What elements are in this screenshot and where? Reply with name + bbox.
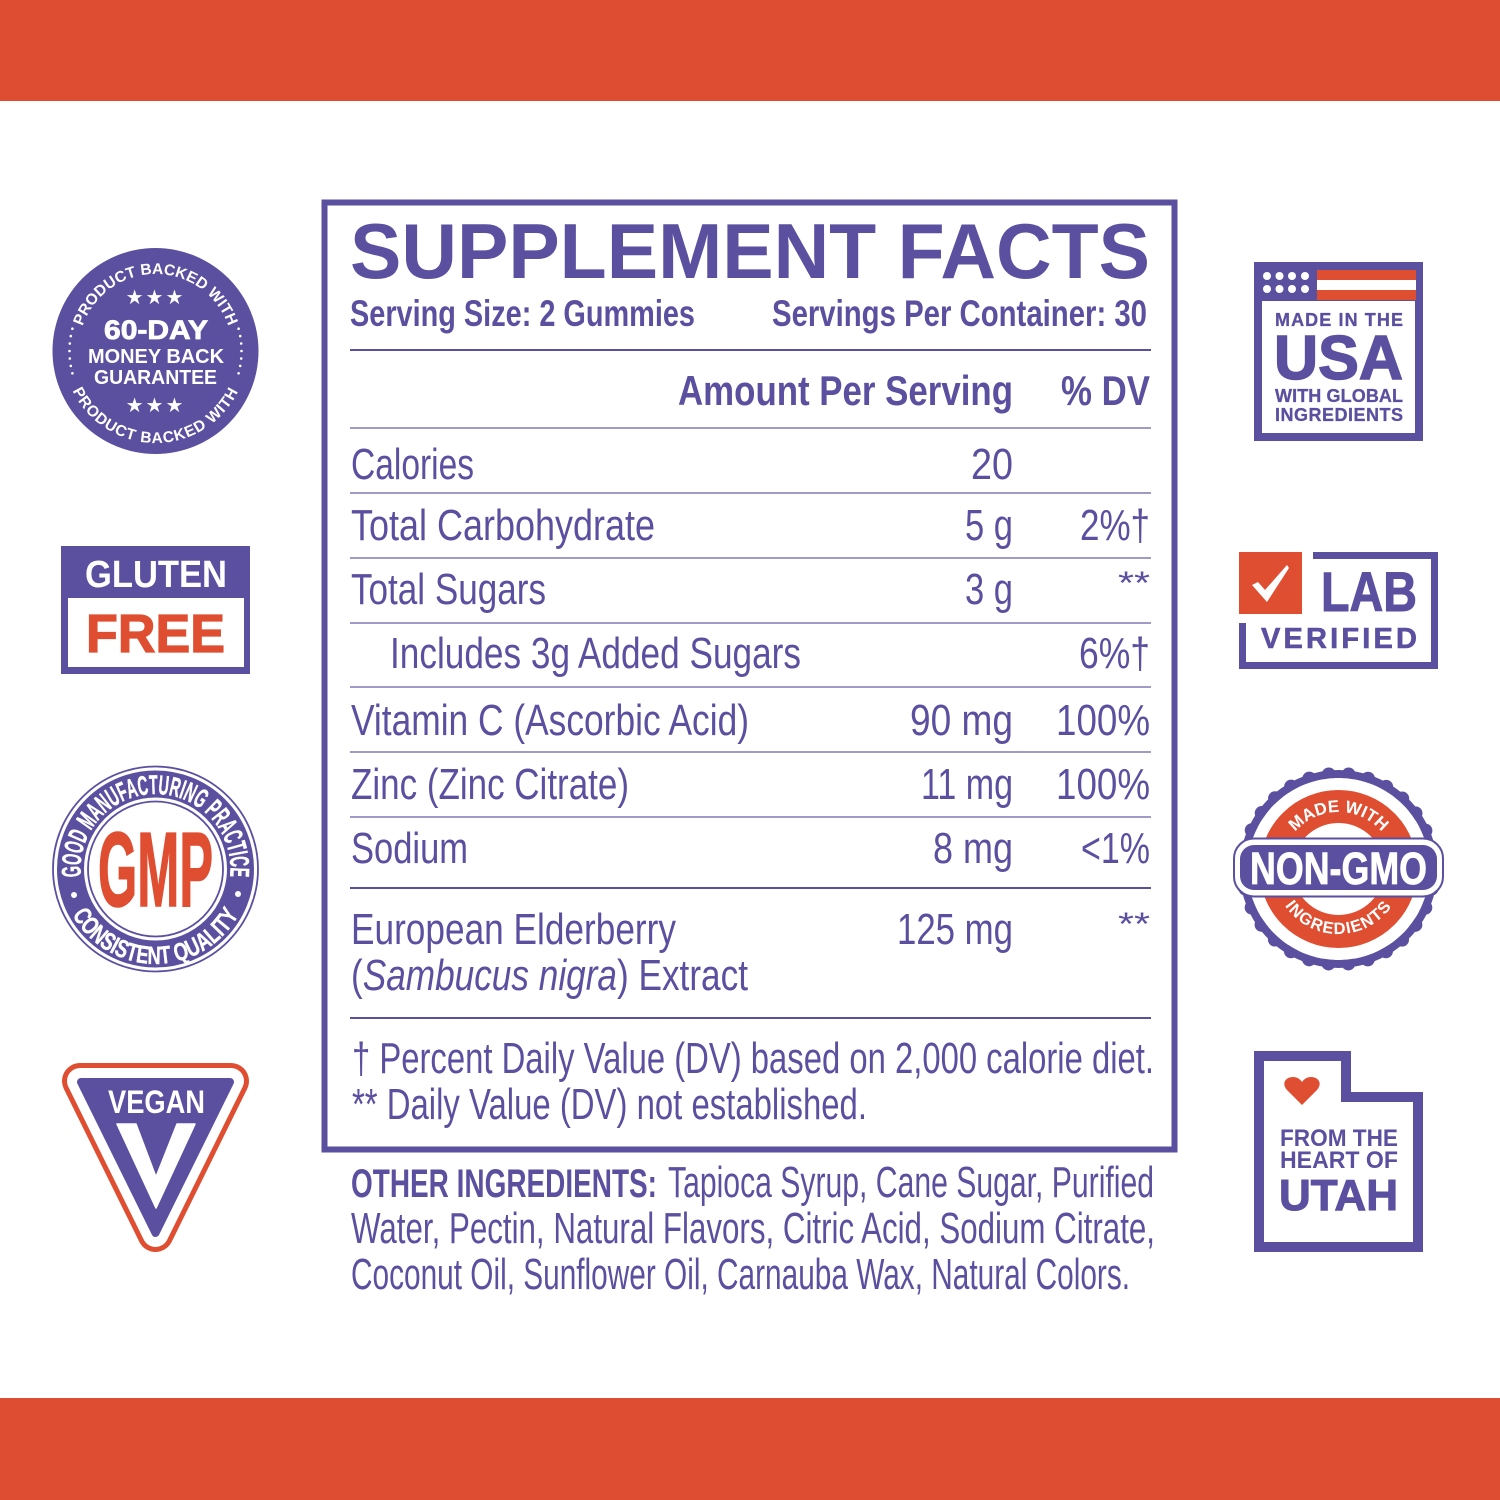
other ingredients: Tapioca Syrup, Cane Sugar, Purified [668,1158,1154,1207]
badge: 60-day money back guarantee: PRODUCT BACKED WITH [72,386,238,444]
footnotes [352,1034,1154,1129]
row: vitamin c: 100% [1056,696,1150,745]
badge: made in the usa: USA [1274,324,1403,393]
row: calories: Calories [351,440,474,489]
badge: 60-day money back guarantee: MONEY BACK [88,345,224,368]
badge: gluten free: FREE [86,604,225,664]
top orange band [0,0,1500,101]
row: sodium [351,824,1150,873]
row: sodium: 8 mg [933,824,1013,873]
badge: vegan [80,1081,231,1234]
badge: gluten free [61,546,250,674]
footnotes: † Percent Daily Value (DV) based on 2,000 calorie diet. [352,1034,1154,1083]
badge: from the heart of utah [1259,1056,1418,1247]
bottom orange band [0,1398,1500,1500]
row: total carbohydrate: 5 g [965,501,1013,550]
row: added sugars [390,629,1150,678]
serving size: Serving Size: 2 Gummies [350,293,695,334]
panel: supplement facts [324,202,1174,1150]
row: sodium: <1% [1081,824,1150,873]
row: total sugars: 3 g [965,565,1013,614]
badge: lab verified: VERIFIED [1261,623,1417,655]
badge: made in the usa: MADE IN THE [1275,310,1403,330]
row: sodium: Sodium [351,824,468,873]
other ingredients: Coconut Oil, Sunflower Oil, Carnauba Wax, Natural Colors. [351,1250,1130,1299]
column header: percent daily value: % DV [1061,367,1150,414]
badge: GMP: GOOD MANUFACTURING PRACTICE [62,775,250,877]
badge: 60-day money back guarantee [52,248,258,454]
badge: lab verified [1239,552,1434,666]
row: total sugars: ** [1118,565,1150,601]
other ingredients [351,1158,1155,1299]
badge: vegan: VEGAN [108,1084,205,1120]
row: european elderberry: ** [1118,906,1150,942]
row: zinc: 11 mg [921,760,1013,809]
row: vitamin c: Vitamin C (Ascorbic Acid) [351,696,749,745]
other ingredients: Water, Pectin, Natural Flavors, Citric Acid, Sodium Citrate, [351,1204,1155,1253]
badge: non-gmo [1233,768,1444,970]
row: total carbohydrate [351,501,1150,550]
icon: heart [1284,1077,1320,1105]
row: european elderberry [351,905,1150,1000]
row: added sugars: Includes 3g Added Sugars [390,629,801,678]
footnotes: ** Daily Value (DV) not established. [352,1080,867,1129]
badge: lab verified: LAB [1321,560,1417,623]
badge: non-gmo: NON-GMO [1250,843,1427,894]
row: calories [351,440,1013,489]
other ingredients: OTHER INGREDIENTS: [351,1162,657,1206]
row: calories: 20 [971,440,1013,489]
badge: from the heart of utah: HEART OF [1280,1147,1398,1174]
row: vitamin c: 90 mg [910,696,1013,745]
badge: 60-day money back guarantee: ★★★ [126,285,185,309]
badge: 60-day money back guarantee: 60-DAY [104,315,208,345]
row: added sugars: 6%† [1079,629,1150,678]
badge: 60-day money back guarantee: ★★★ [126,393,185,417]
badge: from the heart of utah: FROM THE [1280,1125,1398,1152]
column header: amount per serving: Amount Per Serving [678,367,1013,414]
badge: GMP: GMP [98,811,213,929]
row: european elderberry: 125 mg [897,905,1013,954]
badge: non-gmo: INGREDIENTS [1286,900,1390,934]
row: vitamin c [351,696,1150,745]
heading: supplement facts: SUPPLEMENT FACTS [350,207,1150,295]
row: total carbohydrate: 2%† [1080,501,1150,550]
row: zinc [351,760,1150,809]
badge: from the heart of utah: UTAH [1279,1171,1398,1220]
badge: gluten free: GLUTEN [85,554,227,596]
badge: made in the usa: INGREDIENTS [1275,405,1403,425]
servings per container: Servings Per Container: 30 [772,293,1147,334]
row: total sugars [351,565,1150,614]
row: zinc: Zinc (Zinc Citrate) [351,760,629,809]
row: total sugars: Total Sugars [351,565,546,614]
row: european elderberry: (Sambucus nigra) Extract [351,951,748,1000]
row: zinc: 100% [1056,760,1150,809]
badge: GMP [52,766,259,972]
badge: made in the usa: WITH GLOBAL [1275,386,1403,406]
badge: made in the usa [1254,262,1423,441]
badge: 60-day money back guarantee: PRODUCT BACKED WITH [73,263,238,326]
badge: 60-day money back guarantee: GUARANTEE [94,366,217,389]
badge: non-gmo: MADE WITH [1288,800,1390,831]
row: total carbohydrate: Total Carbohydrate [351,501,655,550]
badge: GMP: CONSISTENT QUALITY [74,905,237,964]
row: european elderberry: European Elderberry [351,905,676,954]
